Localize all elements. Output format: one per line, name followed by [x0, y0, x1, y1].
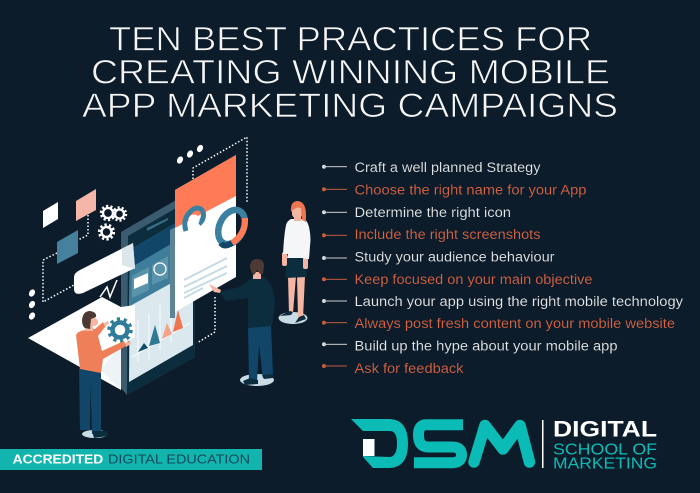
logo letter S: [414, 425, 463, 463]
DSM logo: SCHOOL OF: [553, 441, 657, 458]
floating squares: [43, 189, 96, 264]
document panel: [170, 155, 250, 318]
item 7: Launch your app using the right mobile technology: [354, 294, 683, 309]
icon: blue gear: [109, 319, 131, 341]
DSM logo: [351, 417, 657, 472]
icon: gears: [99, 206, 126, 239]
avatar arc: [185, 208, 203, 231]
item 10: Ask for feedback: [354, 361, 464, 376]
person: man in dark sweater: [209, 259, 275, 386]
illustration: mobile app team: [28, 137, 311, 438]
item 6: Keep focused on your main objective: [354, 272, 592, 287]
title: APP MARKETING CAMPAIGNS: [82, 87, 618, 125]
white banner: [74, 243, 135, 294]
phone: [121, 189, 195, 395]
item 1: Craft a well planned Strategy: [354, 160, 541, 175]
title: [82, 20, 618, 125]
accredited banner: DIGITAL EDUCATION: [108, 452, 250, 467]
accredited banner: ACCREDITED: [13, 452, 103, 467]
logo letter M: [474, 426, 530, 462]
person: woman: [278, 201, 310, 324]
item 3: Determine the right icon: [354, 205, 511, 220]
dots top: [176, 144, 204, 165]
accredited banner: [0, 449, 262, 470]
item 5: Study your audience behaviour: [354, 250, 555, 264]
item 2: Choose the right name for your App: [354, 182, 586, 198]
logo wordmark: DIGITAL: [553, 417, 657, 442]
donut chart: [213, 206, 250, 248]
bullet list: [322, 160, 683, 376]
white platform: [28, 297, 135, 390]
item 8: Always post fresh content on your mobile website: [354, 316, 675, 331]
person: man in orange: [76, 311, 131, 438]
title: TEN BEST PRACTICES FOR: [109, 20, 592, 58]
item 4: Include the right screenshots: [354, 227, 541, 242]
dotted connectors: [43, 137, 247, 343]
DSM logo: MARKETING: [553, 455, 657, 472]
logo letter D: [351, 419, 408, 468]
dots left: [28, 288, 36, 321]
logo divider: [542, 420, 544, 468]
item 9: Build up the hype about your mobile app: [354, 338, 618, 354]
zigzag line: [100, 280, 117, 297]
logo white square: [363, 439, 374, 456]
title: CREATING WINNING MOBILE: [91, 54, 610, 92]
text lines: [184, 258, 227, 298]
